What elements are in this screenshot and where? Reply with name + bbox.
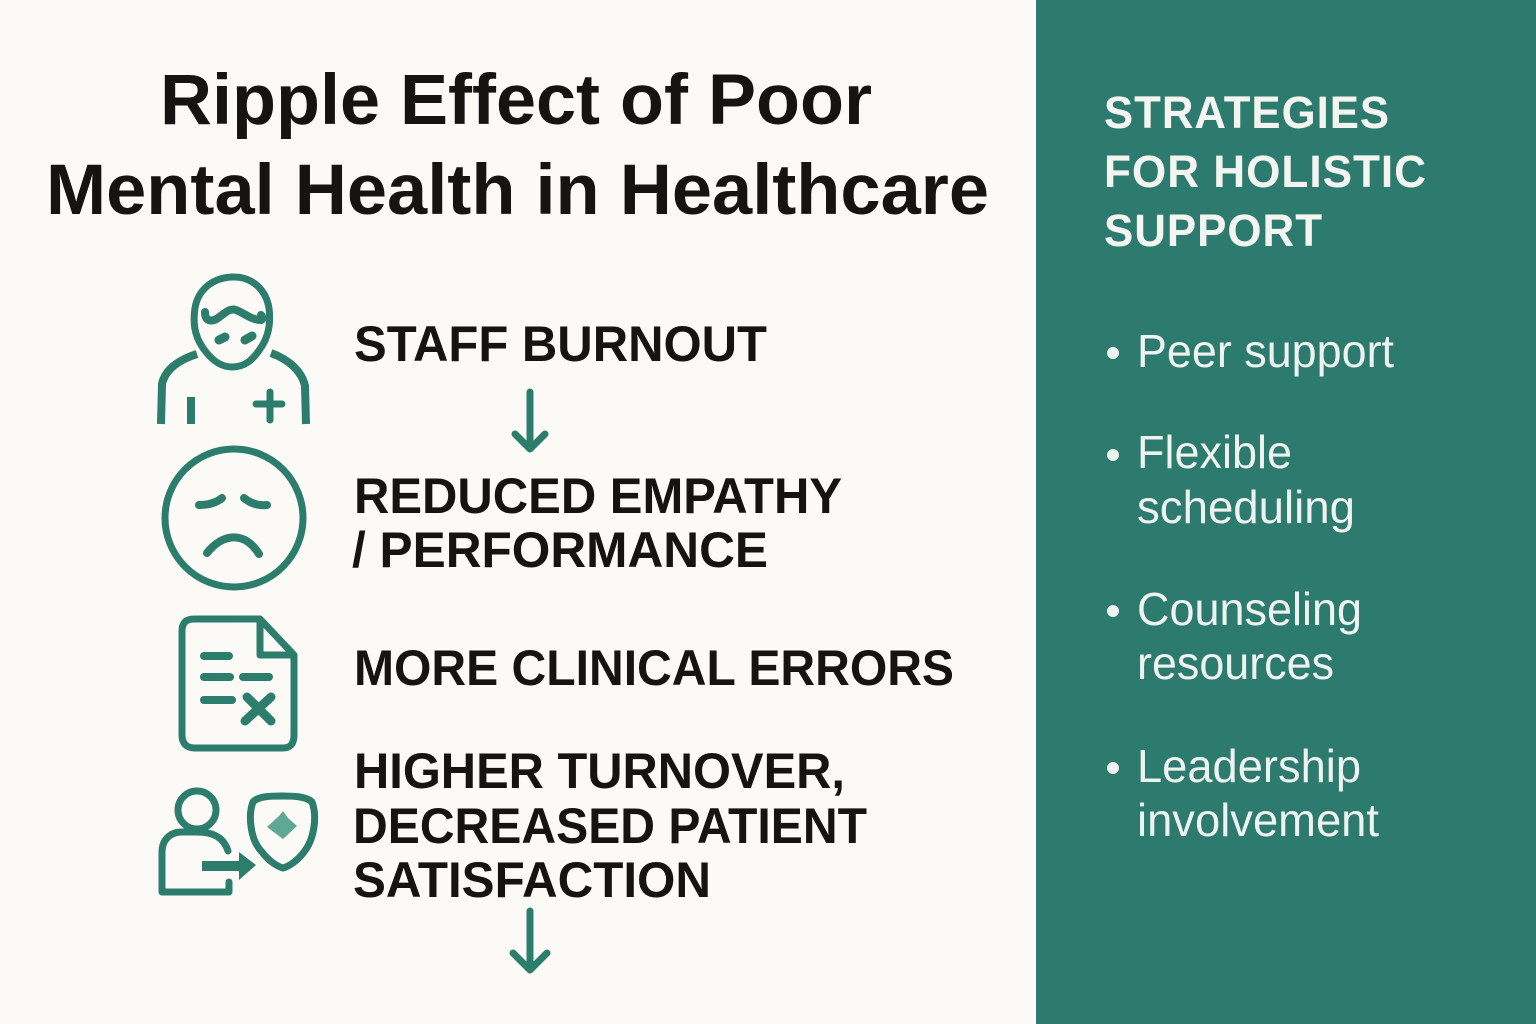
label: reduced empathy / performance [352, 468, 842, 578]
label: higher turnover, decreased patient satisfaction [353, 743, 867, 908]
icon: sad face [165, 449, 303, 587]
bullet: peer support: Peer support [1137, 325, 1394, 377]
arrow: burnout to empathy [515, 392, 545, 449]
icon: burned-out staff member [161, 277, 306, 424]
label: staff burnout: STAFF BURNOUT [354, 316, 767, 372]
label: higher turnover, decreased patient satisfaction: HIGHER TURNOVER, [354, 743, 845, 799]
title [46, 61, 989, 230]
label: reduced empathy / performance: REDUCED EMPATHY [354, 468, 842, 524]
title: Mental Health in Healthcare [46, 151, 989, 230]
icon: document with error mark [182, 619, 294, 748]
bullet: flexible scheduling: scheduling [1137, 481, 1355, 533]
label: higher turnover, decreased patient satisfaction: SATISFACTION [353, 852, 711, 908]
heading: strategies for holistic support: FOR HOLISTIC [1104, 146, 1427, 197]
bullet: leadership involvement: Leadership [1137, 740, 1361, 792]
bullet: counseling resources [1107, 583, 1362, 689]
bullet: flexible scheduling [1107, 426, 1355, 533]
title: Ripple Effect of Poor [160, 61, 872, 140]
bullet: counseling resources: Counseling [1137, 583, 1362, 635]
heading: strategies for holistic support: SUPPORT [1104, 205, 1323, 256]
bullet: counseling resources: resources [1137, 637, 1334, 689]
bullet: leadership involvement [1107, 740, 1379, 846]
heading: strategies for holistic support [1104, 87, 1427, 256]
heading: strategies for holistic support: STRATEGIES [1104, 87, 1390, 138]
bullet: flexible scheduling: Flexible [1137, 426, 1292, 478]
icon: person leaving with shield [162, 791, 315, 892]
bullet: leadership involvement: involvement [1137, 794, 1379, 846]
label: more clinical errors: MORE CLINICAL ERRORS [354, 640, 954, 696]
label: reduced empathy / performance: / PERFORMANCE [352, 522, 768, 578]
label: higher turnover, decreased patient satisfaction: DECREASED PATIENT [353, 798, 867, 854]
panel: strategies background [1036, 0, 1536, 1024]
arrow: continuing ripple [513, 911, 547, 970]
